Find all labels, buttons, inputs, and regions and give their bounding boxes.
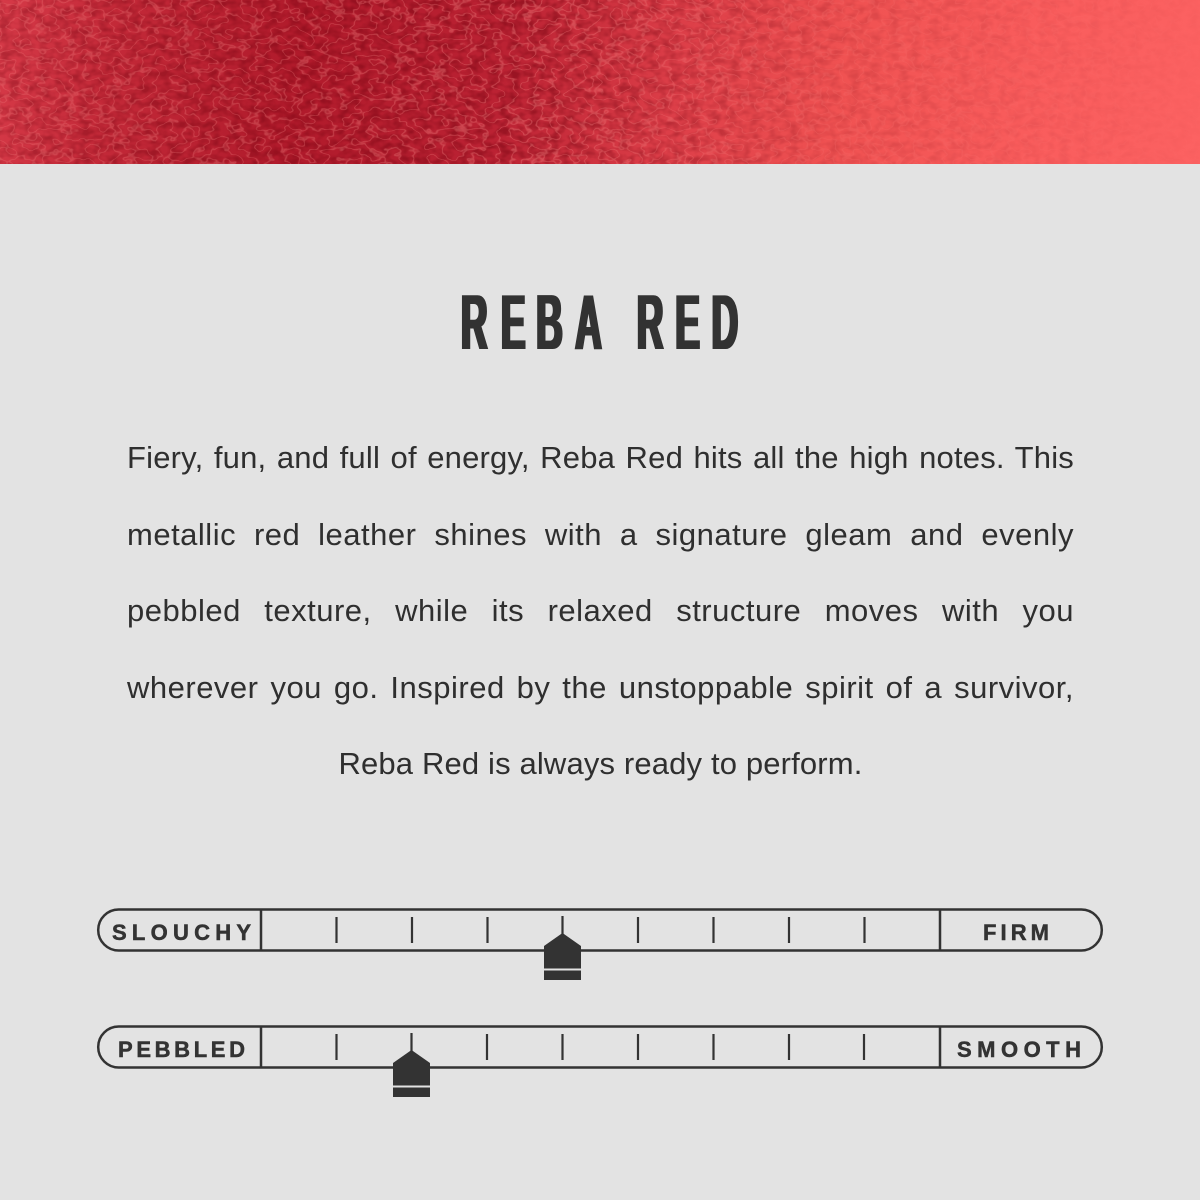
label: pebbled: PEBBLED xyxy=(118,1037,245,1062)
body paragraph: Fiery, fun, and full of energy, Reba Red hits all the high notes. This xyxy=(127,440,1074,475)
slider track xyxy=(98,910,1102,950)
body paragraph: metallic red leather shines with a signature gleam and evenly xyxy=(127,517,1074,552)
slider: pebbled to smooth xyxy=(98,1026,1102,1097)
body paragraph: Reba Red is always ready to perform. xyxy=(338,746,862,781)
label: smooth: SMOOTH xyxy=(957,1037,1081,1062)
leather texture banner xyxy=(0,0,1200,164)
slider: slouchy to firm xyxy=(98,909,1102,980)
marker xyxy=(393,1050,430,1097)
label: firm: FIRM xyxy=(983,920,1049,945)
label: slouchy: SLOUCHY xyxy=(112,920,251,945)
body paragraph xyxy=(127,440,1074,781)
marker xyxy=(544,933,581,980)
body paragraph: pebbled texture, while its relaxed structure moves with you xyxy=(127,593,1074,628)
title: REBA RED xyxy=(461,279,738,366)
scale ticks xyxy=(336,1033,864,1060)
scale ticks xyxy=(336,916,864,943)
slider track xyxy=(98,1026,1102,1068)
body paragraph: wherever you go. Inspired by the unstoppable spirit of a survivor, xyxy=(127,670,1074,705)
